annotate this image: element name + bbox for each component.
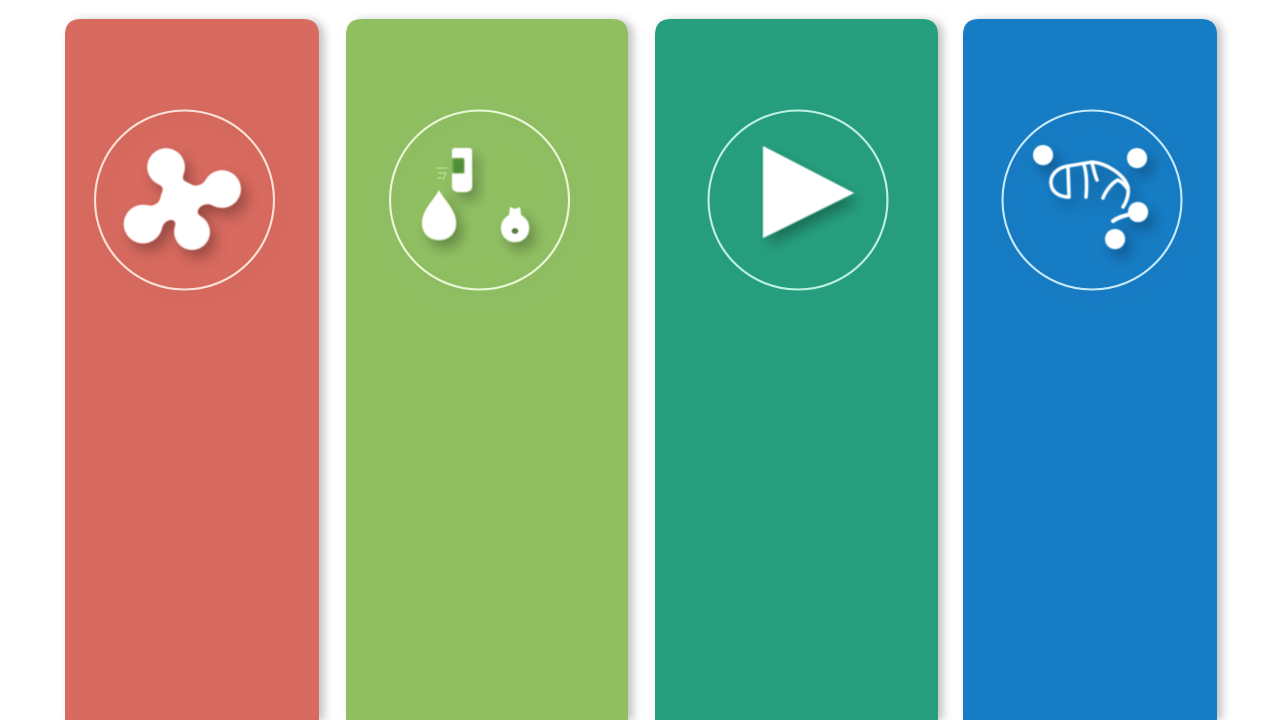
panel: blue card [963, 19, 1217, 720]
icon: dots and curved strokes [1033, 145, 1148, 249]
icon: four-lobed shape [124, 148, 241, 250]
ring: green card [390, 110, 569, 290]
icon: device shape [452, 148, 472, 192]
panel: teal card [655, 19, 938, 720]
panel: green card [346, 19, 628, 720]
icon: water drop [422, 190, 456, 240]
icon: device window [453, 159, 464, 173]
ring: red card [95, 110, 274, 290]
icon: faint glyph [436, 168, 447, 180]
icon: small bulb [501, 207, 529, 242]
icon: play triangle [763, 146, 854, 238]
ring: blue card [1002, 110, 1182, 290]
ring: teal card [708, 110, 888, 290]
panel: red card [65, 19, 319, 720]
